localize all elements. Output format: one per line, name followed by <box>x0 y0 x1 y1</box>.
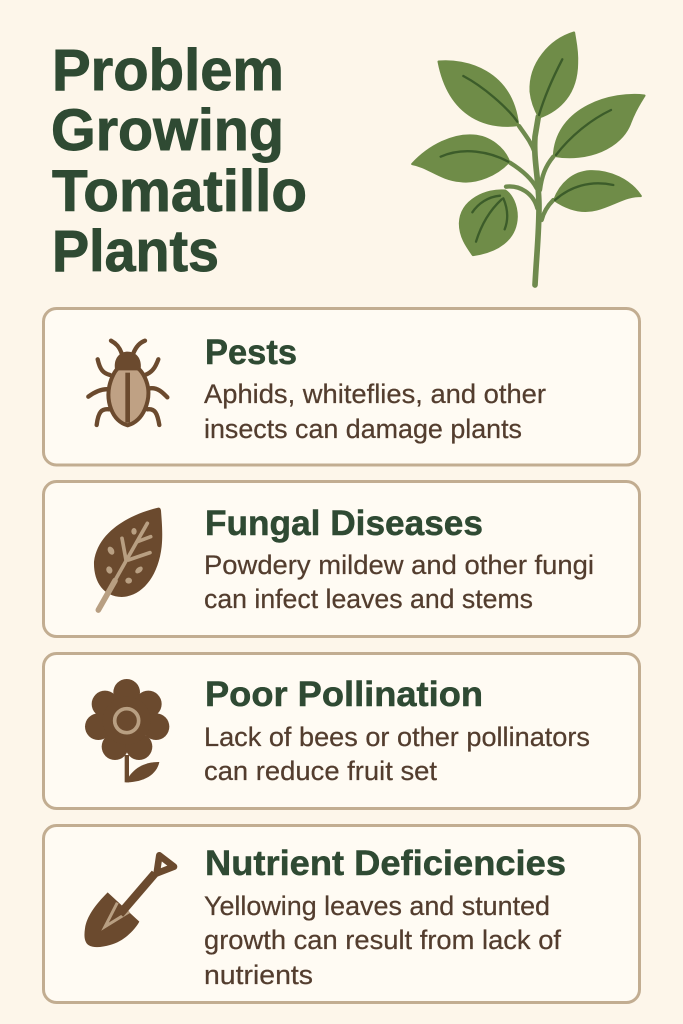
panel: nutrient deficiencies <box>44 826 640 1002</box>
text: fungal diseases description: Powdery mildew and other fungi <box>204 550 594 580</box>
text: poor pollination description: Lack of bees or other pollinators <box>204 722 590 752</box>
title <box>51 38 307 284</box>
text: nutrient deficiencies description: growth can result from lack of <box>204 925 561 955</box>
icon: shovel <box>84 855 174 947</box>
text: poor pollination description <box>204 722 590 786</box>
text: poor pollination description: can reduce fruit set <box>204 756 437 786</box>
icon: beetle <box>88 341 167 425</box>
title: Problem <box>52 38 284 103</box>
text: pests description: Aphids, whiteflies, and other <box>204 379 546 409</box>
text: nutrient deficiencies description <box>204 891 561 990</box>
icon: diseased leaf <box>94 508 162 610</box>
title: Tomatillo <box>52 159 307 224</box>
heading: pests: Pests <box>205 333 297 372</box>
text: nutrient deficiencies description: Yellowing leaves and stunted <box>204 891 550 921</box>
panel: pests <box>44 308 640 465</box>
text: fungal diseases description: can infect leaves and stems <box>204 584 533 614</box>
heading: nutrient deficiencies: Nutrient Deficiencies <box>205 844 566 883</box>
title: Plants <box>52 219 219 284</box>
text: pests description <box>204 379 546 444</box>
heading: fungal diseases: Fungal Diseases <box>205 504 483 543</box>
icon: tomatillo plant <box>412 33 644 285</box>
title: Growing <box>51 98 284 163</box>
text: nutrient deficiencies description: nutrients <box>204 960 313 990</box>
text: fungal diseases description <box>204 550 594 614</box>
panel: poor pollination <box>44 654 640 808</box>
text: pests description: insects can damage plants <box>204 414 522 444</box>
panel: fungal diseases <box>44 482 640 636</box>
heading: poor pollination: Poor Pollination <box>205 675 483 714</box>
icon: flower <box>85 679 169 782</box>
